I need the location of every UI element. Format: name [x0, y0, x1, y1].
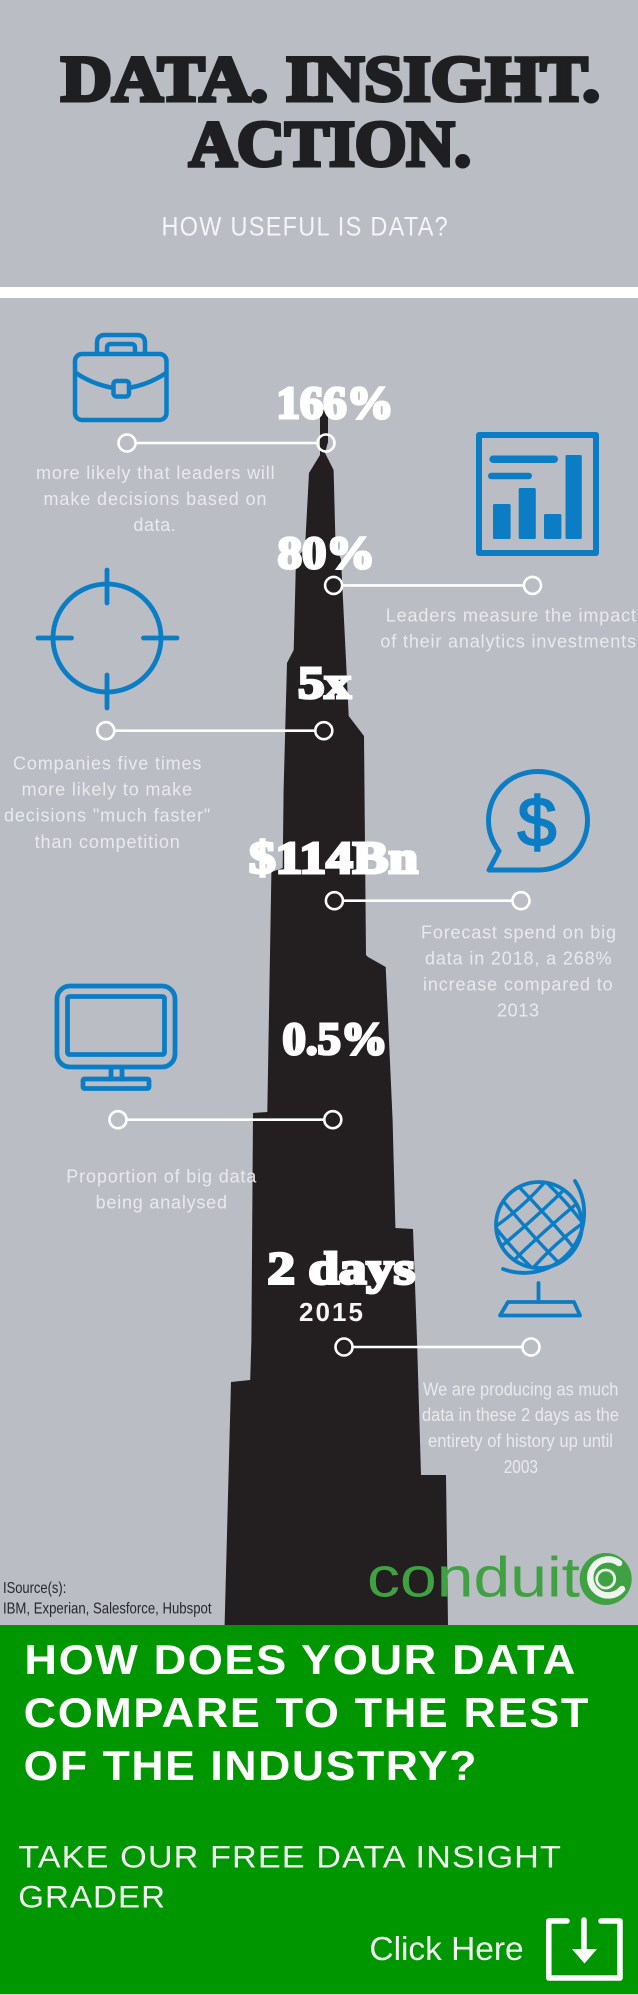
text: producing data: We are producing as much — [423, 1379, 618, 1399]
stat: 0.5%: 0.5% — [282, 1013, 388, 1064]
text: analytics investments: of their analytics investments — [380, 631, 636, 651]
text: companies five times: more likely to make — [22, 780, 192, 800]
CTA subheading: GRADER — [18, 1879, 166, 1915]
text: companies five times — [4, 754, 210, 852]
CTA heading: OF THE INDUSTRY? — [24, 1742, 478, 1789]
stat: $114Bn: $114Bn — [249, 832, 418, 883]
text: leaders decisions: make decisions based on — [44, 489, 266, 509]
stat: 166%: 166% — [276, 377, 394, 428]
sources: IBM, Experian, Salesforce, Hubspot — [3, 1601, 212, 1618]
icon: globe — [494, 1179, 586, 1318]
text: forecast spend: 2013 — [497, 1000, 539, 1020]
text: producing data: entirety of history up until — [428, 1431, 613, 1451]
bottom edge line — [0, 1994, 638, 1995]
text: analytics investments — [380, 605, 636, 651]
year 2015: 2015 — [299, 1297, 363, 1327]
connector 4 — [326, 892, 530, 909]
conduit logo — [367, 1546, 632, 1610]
text: companies five times: decisions "much faster" — [4, 806, 210, 826]
text: companies five times: than competition — [35, 832, 180, 852]
title: DATA. INSIGHT. — [61, 44, 600, 116]
text: forecast spend: increase compared to — [423, 974, 613, 994]
tower silhouette — [225, 410, 448, 1625]
text: producing data: 2003 — [504, 1457, 538, 1477]
click here label: Click Here — [369, 1931, 524, 1968]
text: companies five times: Companies five times — [13, 754, 201, 774]
stat: 2 days: 2 days — [268, 1242, 415, 1294]
stat: 5x: 5x — [298, 657, 351, 708]
connector 2 — [325, 577, 541, 594]
icon: dollar speech bubble — [488, 772, 588, 870]
connector 3 — [97, 722, 332, 739]
CTA subheading: TAKE OUR FREE DATA INSIGHT — [18, 1839, 562, 1875]
text: proportion analysed — [66, 1166, 257, 1213]
CTA heading: HOW DOES YOUR DATA — [24, 1636, 577, 1683]
CTA heading — [24, 1636, 590, 1789]
icon: download arrow — [549, 1920, 620, 1978]
text: forecast spend: Forecast spend on big — [421, 922, 616, 942]
stat: 80%: 80% — [278, 527, 375, 578]
connector 5 — [110, 1111, 341, 1128]
sources — [3, 1580, 212, 1618]
text: leaders decisions: data. — [133, 515, 176, 535]
text: producing data — [422, 1379, 619, 1477]
conduit logo: conduit — [367, 1546, 580, 1610]
text: analytics investments: Leaders measure the impact — [386, 605, 636, 625]
panel: call to action — [0, 1625, 638, 1994]
CTA heading: COMPARE TO THE REST — [24, 1689, 590, 1736]
connector 6 — [336, 1338, 540, 1356]
text: producing data: data in these 2 days as the — [422, 1405, 619, 1425]
icon: briefcase — [75, 335, 166, 420]
text: leaders decisions: more likely that leaders will — [36, 463, 275, 483]
text: leaders decisions — [36, 463, 275, 535]
icon: crosshair — [38, 570, 177, 708]
text: proportion analysed: Proportion of big data — [66, 1166, 257, 1186]
title — [61, 44, 600, 180]
subtitle: HOW USEFUL IS DATA? — [162, 212, 449, 242]
CTA subheading — [18, 1839, 562, 1915]
icon: analytics chart — [479, 435, 596, 553]
icon: dollar speech bubble: $ — [518, 783, 556, 861]
connector 1 — [118, 434, 334, 452]
text: forecast spend: data in 2018, a 268% — [425, 948, 612, 968]
text: proportion analysed: being analysed — [96, 1193, 227, 1213]
sources: ISource(s): — [3, 1580, 66, 1597]
icon: monitor — [57, 986, 175, 1088]
white divider band — [0, 287, 638, 298]
text: forecast spend — [421, 922, 616, 1020]
title: ACTION. — [189, 108, 471, 180]
